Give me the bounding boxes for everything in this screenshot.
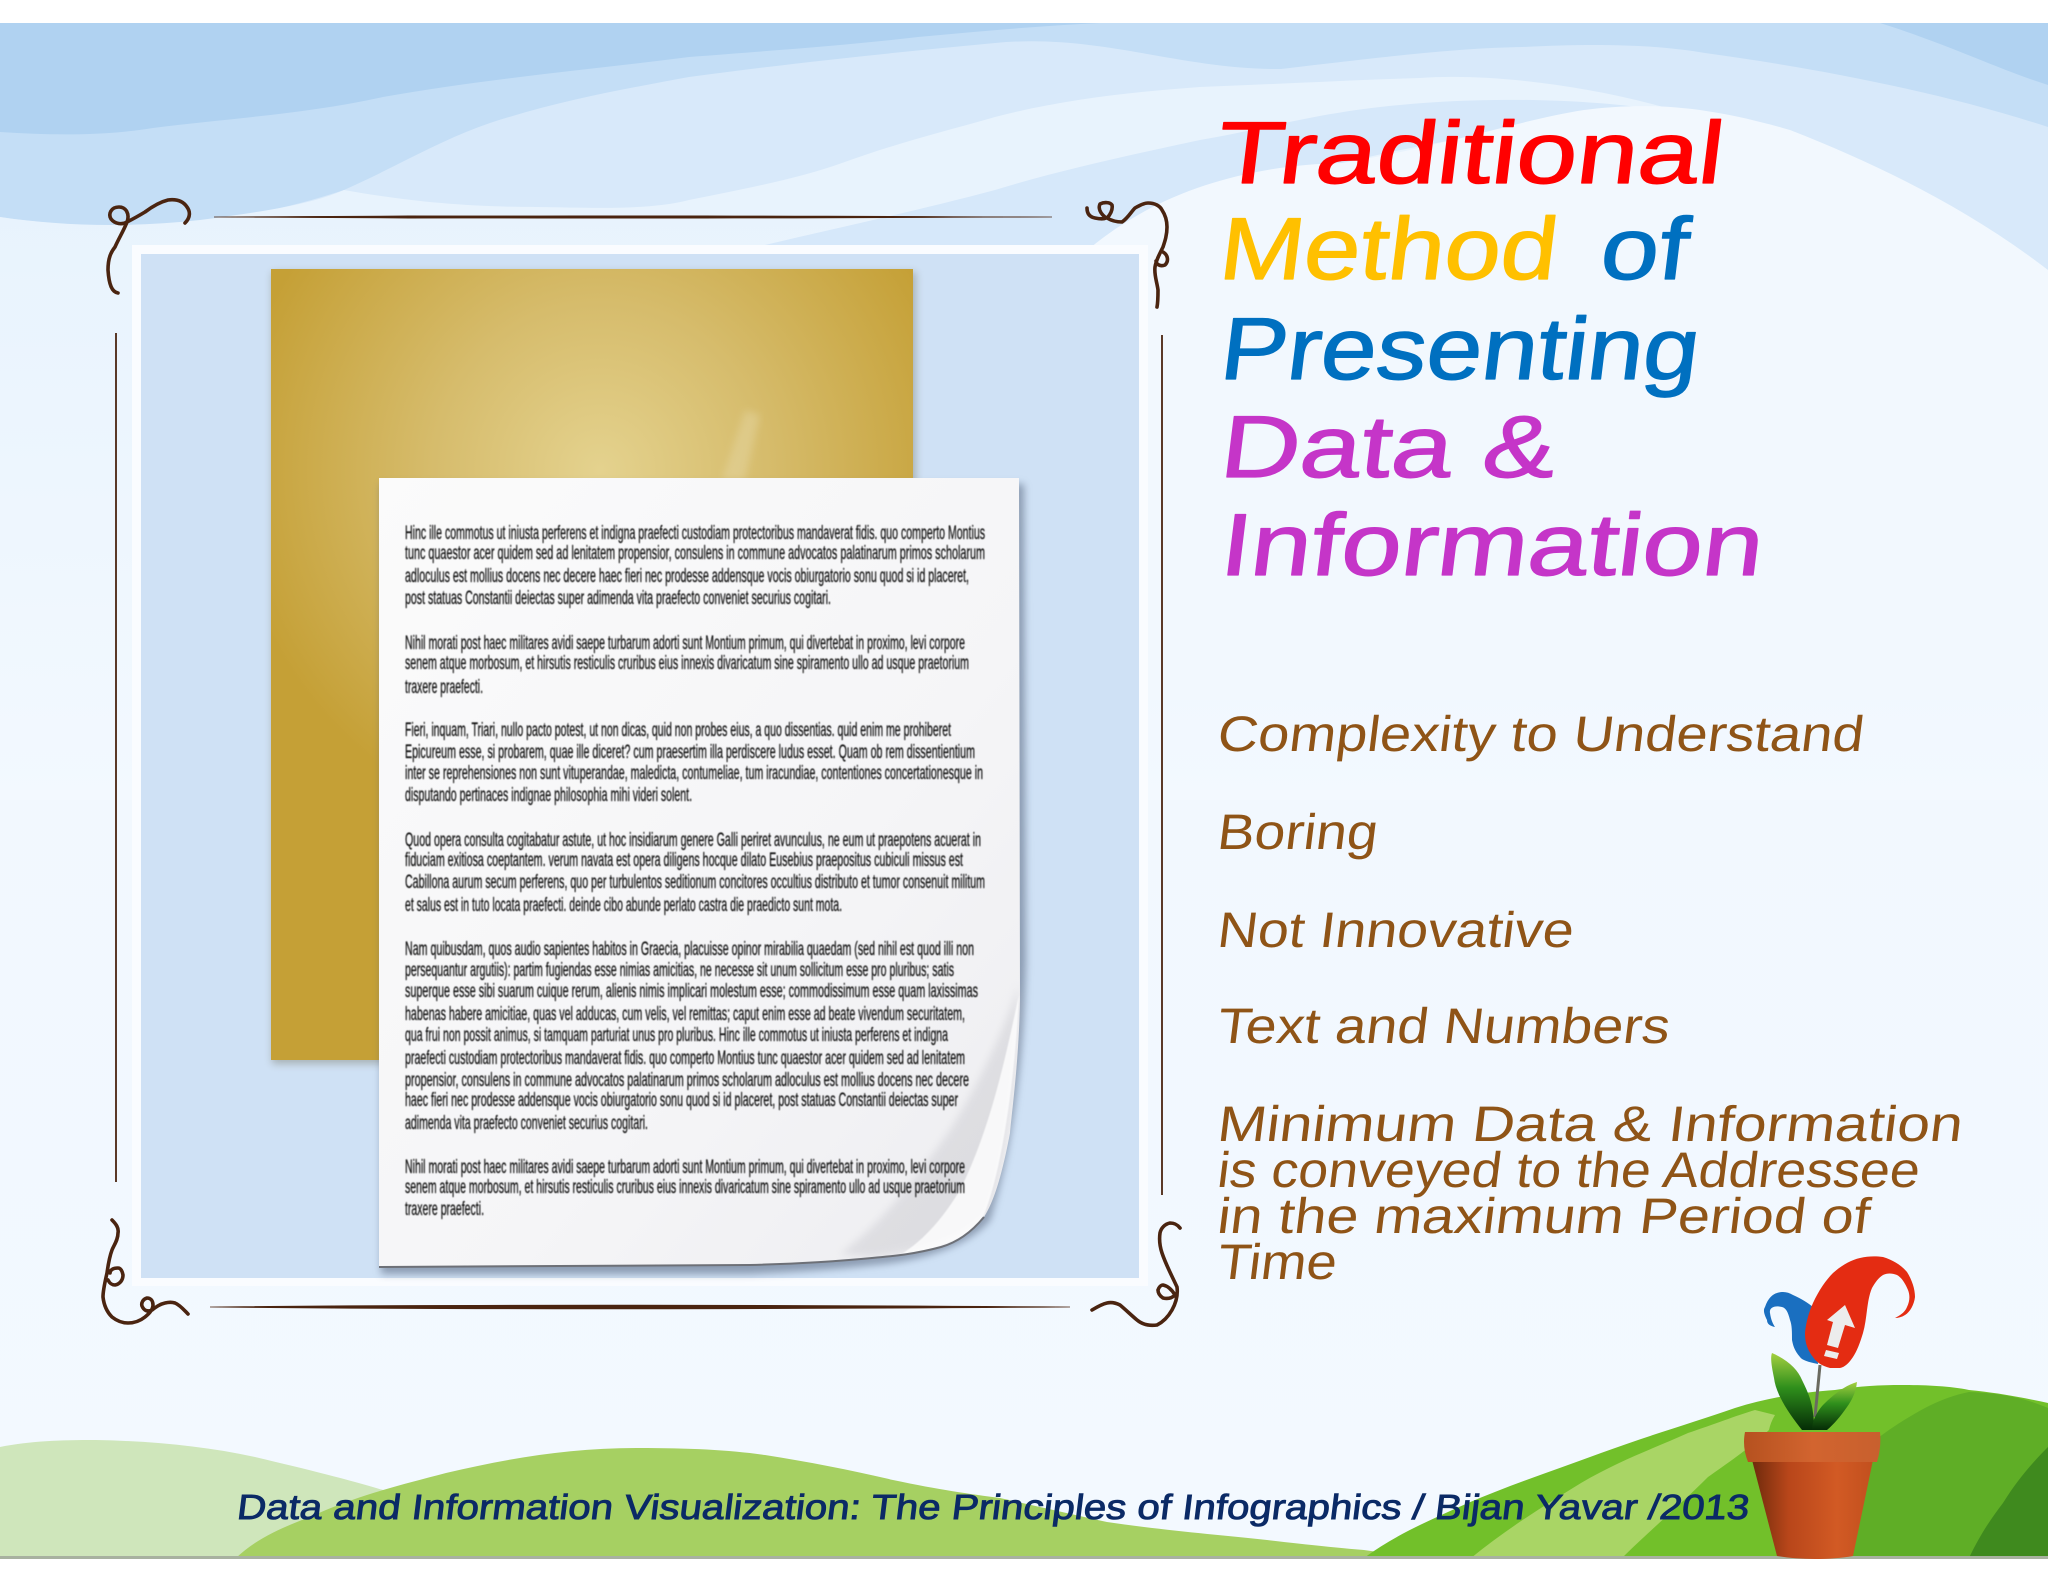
- document body text: disputando pertinaces indignae philosophia mihi videri solent.: [405, 785, 692, 806]
- document body text: traxere praefecti.: [405, 677, 483, 698]
- item: minimum data: Time: [1215, 1234, 1341, 1290]
- white arrow: [1827, 1305, 1855, 1348]
- document body text: Cabillona aurum secum perferens, quo per turbulentos seditionum concitores occultius distributo et tumor consenuit militum: [405, 872, 985, 893]
- item: minimum data: in the maximum Period of: [1215, 1188, 1875, 1244]
- paper curl highlight: [900, 995, 1019, 1255]
- document body text: senem atque morbosum, et hirsutis resticulis cruribus eius innexis divaricatum sine spiramento ullo ad usque praetorium: [405, 653, 969, 674]
- red petal: [1805, 1256, 1915, 1368]
- ornamental frame: [103, 200, 1180, 1325]
- document body text: et salus est in tuto locata praefecti. deinde cibo abunde perlato castra die praedicto sunt mota.: [405, 895, 842, 916]
- bottom rule: [210, 1305, 1070, 1309]
- icon: potted plant logo: [1744, 1256, 1915, 1559]
- gold sheet gloss: [722, 410, 760, 480]
- title line: Data &: Data &: [1216, 397, 1563, 496]
- pot rim: [1744, 1432, 1880, 1462]
- document body text: Quod opera consulta cogitabatur astute, ut hoc insidiarum genere Galli periret avunculus, ne eum ut praepotens acuerat in: [405, 830, 981, 851]
- document body text: Nam quibusdam, quos audio sapientes habitos in Graecia, placuisse opinor mirabilia quaedam (sed nihil est quod illi non: [405, 939, 974, 960]
- left rule: [115, 333, 117, 1182]
- document body text: post statuas Constantii deiectas super adimenda vita praefecto conveniet securius cogitari.: [405, 588, 831, 609]
- item: minimum data: Minimum Data & Information: [1215, 1096, 1967, 1152]
- document body text: [405, 523, 985, 1220]
- title: [1212, 103, 1770, 594]
- left leaf: [1771, 1353, 1815, 1430]
- darkest slope on hill: [1969, 1447, 2048, 1558]
- document body text: Nihil morati post haec militares avidi saepe turbarum adorti sunt Montium primum, qui divertebat in proximo, levi corpore: [405, 1157, 965, 1178]
- corner flourish bottom right: [1092, 1223, 1180, 1325]
- document body text: Epicureum esse, si probarem, quae ille diceret? cum praesertim illa perdiscere ludus esset. Quam ob rem dissentientium: [405, 742, 975, 763]
- title line: Traditional: Traditional: [1212, 103, 1730, 202]
- list of drawbacks: [1215, 706, 1967, 1290]
- item: minimum data: [1215, 1096, 1967, 1290]
- document body text: tunc quaestor acer quidem sed ad lenitatem propensior, consulens in commune advocatos palatinarum primos scholarum: [405, 543, 985, 564]
- document body text: qua frui non possit animus, si tamquam parturiat unus pro pluribus. Hinc ille commotus ut iniusta perferens et indigna: [405, 1025, 948, 1046]
- pot body: [1752, 1460, 1873, 1559]
- arrow base: [1824, 1350, 1839, 1359]
- document body text: habenas habere amicitiae, quas vel adducas, cum velis, vel remittas; caput enim esse ad beate vivendum securitatem,: [405, 1004, 965, 1025]
- item: minimum data: is conveyed to the Addressee: [1215, 1142, 1924, 1198]
- white mat: [132, 245, 1148, 1286]
- olive green hill: [236, 1448, 1420, 1558]
- top rule: [214, 216, 1052, 218]
- title word: Method: Method: [1215, 199, 1564, 298]
- document body text: fiduciam exitiosa coeptantem. verum navata est opera diligens hocque dilato Eusebius praepositus cubiculi missus est: [405, 850, 963, 871]
- document body text: praefecti custodiam protectoribus mandaverat fidis. quo comperto Montius tunc quaestor acer quidem sed ad lenitatem: [405, 1048, 965, 1069]
- document body text: superque esse sibi suarum cuique rerum, alienis nimis implicari molestum esse; commodissimum esse quam laxissimas: [405, 981, 978, 1002]
- item: not innovative: Not Innovative: [1215, 902, 1578, 958]
- footer credit: Data and Information Visualization: The Principles of Infographics / Bijan Yavar /2013: [235, 1488, 1752, 1527]
- gold sheet: [271, 269, 913, 1060]
- paper shadow: [381, 484, 1026, 1274]
- blue panel: [141, 254, 1139, 1278]
- document body text: adimenda vita praefecto conveniet securius cogitari.: [405, 1113, 648, 1134]
- paper bottom edge: [379, 1217, 984, 1267]
- corner flourish top left: [108, 200, 189, 293]
- item: boring: Boring: [1215, 804, 1382, 860]
- corner flourish top right: [1087, 203, 1167, 307]
- darker slope on hill: [1790, 1392, 2048, 1558]
- document body text: inter se reprehensiones non sunt vituperandae, maledicta, contumeliae, tum iracundiae, contentiones concertationesque in: [405, 763, 983, 784]
- light stripe on hill: [1471, 1410, 1775, 1558]
- pale left hill: [0, 1440, 470, 1558]
- photo frame panel: [132, 245, 1148, 1286]
- document body text: traxere praefecti.: [405, 1199, 484, 1220]
- right leaf: [1812, 1382, 1857, 1430]
- document body text: Nihil morati post haec militares avidi saepe turbarum adorti sunt Montium primum, qui divertebat in proximo, levi corpore: [405, 633, 965, 654]
- paper sheet: [379, 478, 1020, 1267]
- gold sheet shadow: [272, 272, 916, 1064]
- item: complexity: Complexity to Understand: [1215, 706, 1868, 762]
- stem: [1815, 1365, 1820, 1417]
- right rule: [1161, 335, 1163, 1195]
- item: text and numbers: Text and Numbers: [1215, 998, 1674, 1054]
- document body text: propensior, consulens in commune advocatos palatinarum primos scholarum adloculus est mollius docens nec decere: [405, 1070, 969, 1091]
- document body text: senem atque morbosum, et hirsutis resticulis cruribus eius innexis divaricatum sine spiramento ullo ad usque praetorium: [405, 1177, 965, 1198]
- title word: of: of: [1596, 199, 1695, 298]
- white margin bottom: [0, 1559, 2048, 1582]
- hills: [0, 1385, 2048, 1559]
- blue petal: [1764, 1292, 1818, 1364]
- bright green hill: [1364, 1385, 2048, 1558]
- document body text: haec fieri nec prodesse addensque vocis obiurgatorio sonu quod si id placeret, post statuas Constantii deiectas super: [405, 1090, 958, 1111]
- document body text: Hinc ille commotus ut iniusta perferens et indigna praefecti custodiam protectoribus mandaverat fidis. quo comperto Montius: [405, 523, 985, 544]
- title line: Presenting: Presenting: [1216, 299, 1706, 398]
- corner flourish bottom left: [103, 1220, 188, 1323]
- document body text: adloculus est mollius docens nec decere haec fieri nec prodesse addensque vocis obiurgatorio sonu quod si id placeret,: [405, 566, 969, 587]
- icon: document: [271, 269, 1026, 1274]
- paper fold shading: [840, 985, 1019, 1257]
- document body text: persequantur argutiis): partim fugiendas esse nimias amicitias, ne necesse sit unum sollicitum esse pro pluribus; satis: [405, 960, 954, 981]
- document body text: Fieri, inquam, Triari, nullo pacto potest, ut non dicas, quid non probes eius, a quo dissentias. quid enim me prohiberet: [405, 720, 951, 741]
- title line: Information: Information: [1216, 495, 1770, 594]
